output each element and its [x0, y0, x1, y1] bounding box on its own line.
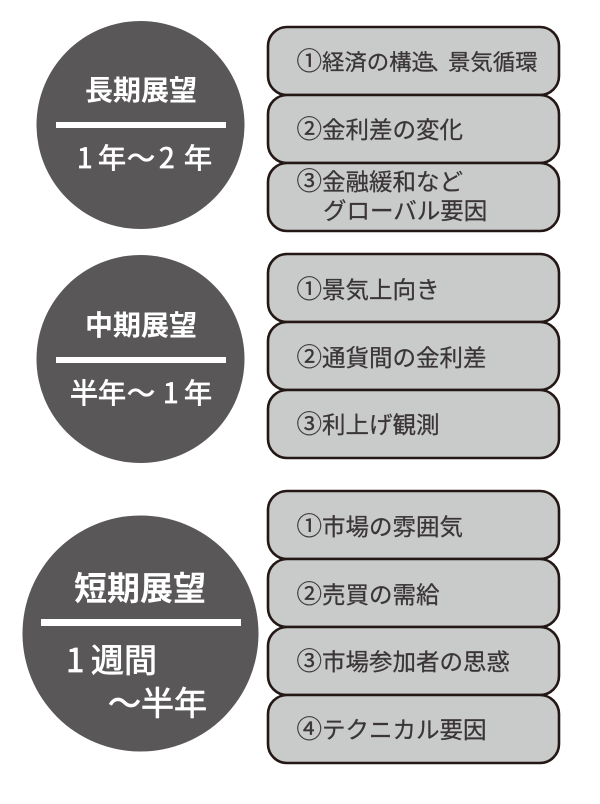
text: short-term factor 1: ① [296, 506, 322, 543]
text: one to two years: 2 [159, 137, 175, 177]
text: medium-term factor 1: 景気上向き [322, 271, 440, 305]
text: long-term factor 3: 金融緩和など [322, 163, 463, 197]
text: one week to half year: 1 [66, 634, 84, 682]
text: short-term factor 4: テクニカル要因 [322, 711, 486, 745]
text: short-term factor 1: 市場の雰囲気 [322, 508, 463, 542]
heading: medium-term outlook: 中期展望 [85, 304, 197, 344]
text: one week to half year: ～半年 [108, 677, 207, 725]
panel: long-term outlook circle [36, 21, 244, 229]
text: half year to one year: 1 [163, 372, 179, 412]
text: half year to one year: 年 [184, 372, 212, 412]
text: short-term factor 2: ② [296, 574, 322, 611]
text: medium-term factor 1: ① [296, 269, 322, 306]
text: long-term factor 2: 金利差の変化 [322, 111, 463, 145]
text: one week to half year: 週間 [91, 634, 157, 682]
panel: medium-term factors [268, 254, 559, 458]
text: long-term factor 1: 、 [430, 45, 452, 77]
text: long-term factor 1: ① [296, 41, 322, 78]
text: one to two years: 年 [98, 137, 126, 177]
text: short-term factor 3: ③ [296, 641, 322, 678]
text: short-term factor 2: 売買の需給 [322, 576, 440, 610]
text: medium-term factor 3: 利上げ観測 [322, 406, 440, 440]
heading: short-term outlook: 短期展望 [74, 562, 206, 610]
text: medium-term factor 2: ② [296, 337, 322, 374]
text: long-term factor 3: ③ [296, 161, 322, 198]
text: long-term factor 1: 景気循環 [448, 45, 538, 77]
text: short-term factor 4: ④ [296, 709, 322, 746]
panel: short-term outlook circle [22, 516, 258, 752]
text: medium-term factor 2: 通貨間の金利差 [322, 339, 486, 373]
text: long-term factor 3: グローバル要因 [323, 192, 487, 226]
text: short-term factor 3: 市場参加者の思惑 [322, 643, 510, 677]
text: medium-term factor 3: ③ [296, 404, 322, 441]
text: half year to one year: 半 [70, 372, 98, 412]
text: half year to one year: ～ [127, 372, 155, 412]
text: half year to one year: 年 [98, 372, 126, 412]
text: one to two years: 年 [184, 137, 212, 177]
panel: long-term factors [268, 27, 559, 231]
panel: short-term factors [268, 491, 559, 763]
text: one to two years: 1 [77, 137, 93, 177]
text: long-term factor 2: ② [296, 109, 322, 146]
text: one to two years: ～ [127, 137, 155, 177]
text: long-term factor 1: 経済の構造 [322, 45, 434, 77]
panel: medium-term outlook circle [36, 255, 244, 463]
heading: long-term outlook: 長期展望 [85, 69, 197, 109]
